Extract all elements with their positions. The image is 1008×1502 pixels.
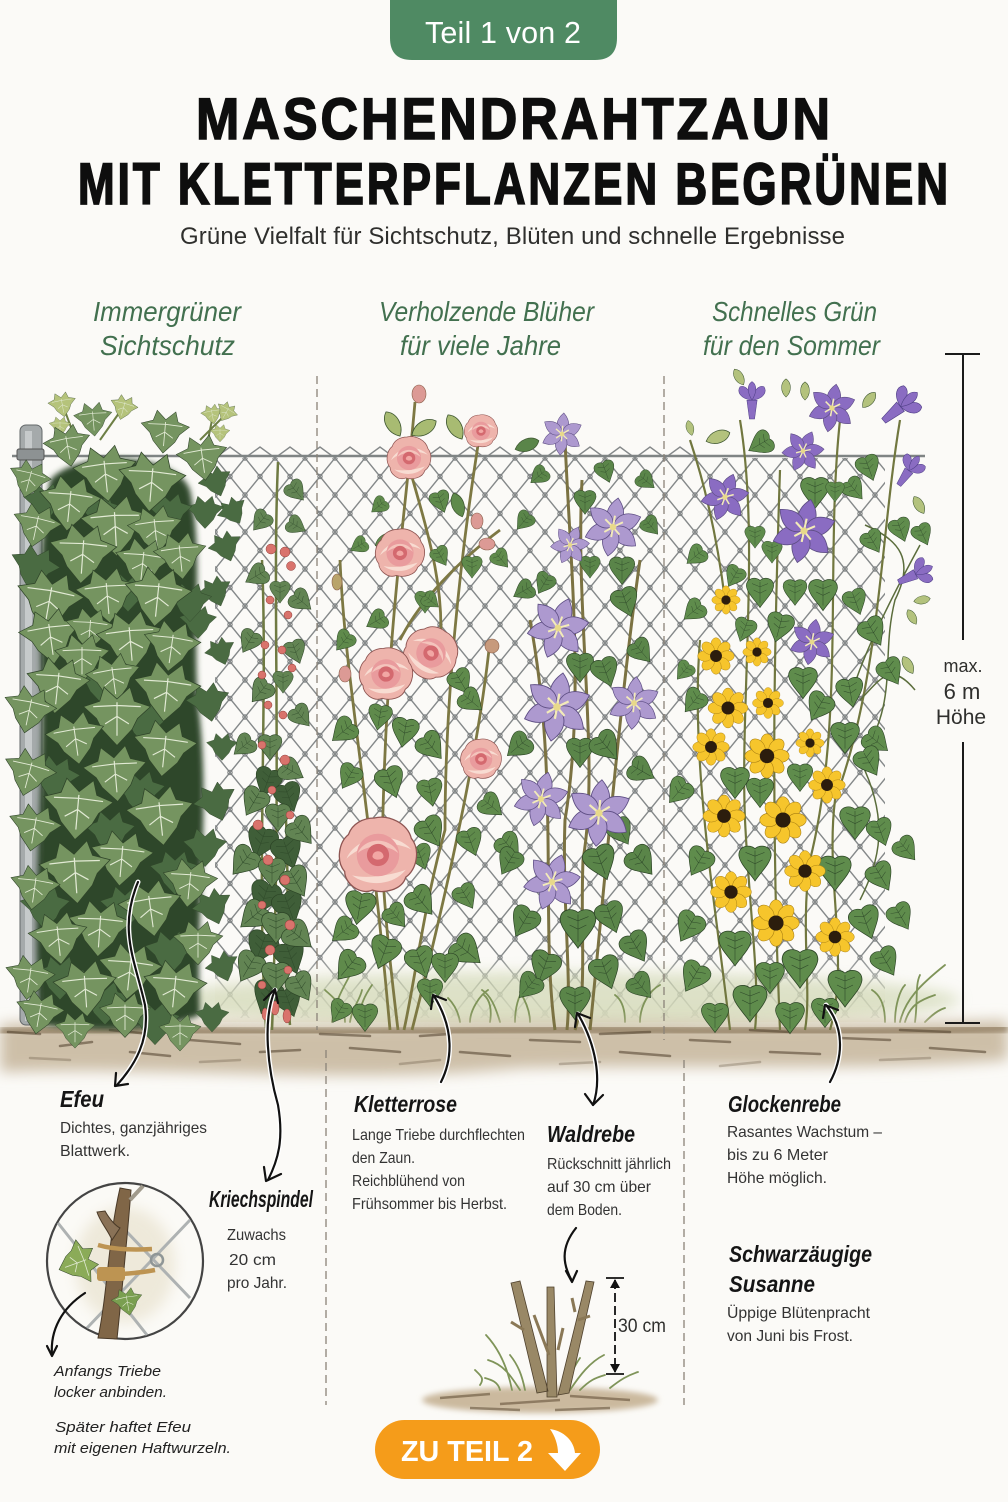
- label: Waldrebe: auf 30 cm über: [547, 1179, 652, 1196]
- label: Schwarzäugige Susanne: von Juni bis Frost.: [727, 1328, 853, 1345]
- category heading: Verholzende Blüher: Verholzende Blüher: [379, 296, 595, 327]
- label: Schwarzäugige Susanne: Üppige Blütenpracht: [727, 1304, 871, 1322]
- label: Kriechspindel: [209, 1186, 313, 1292]
- max height marker: [936, 354, 986, 1023]
- category heading: Schnelles Grün: für den Sommer: [703, 330, 881, 361]
- handwritten note: Später haftet Efeu: [54, 1419, 231, 1457]
- category heading: Schnelles Grün: [703, 296, 881, 361]
- top badge: Teil 1 von 2: [390, 0, 617, 60]
- category heading: Immergrüner Sichtschutz: Sichtschutz: [100, 330, 235, 361]
- label: Kriechspindel: Zuwachs: [227, 1227, 286, 1244]
- plant: Kriechspindel: [222, 462, 322, 1030]
- ground haze and grass: [160, 965, 960, 1028]
- handwritten note: Anfangs Triebe: locker anbinden.: [54, 1384, 167, 1401]
- handwritten note: Anfangs Triebe: [53, 1363, 167, 1401]
- arrow: Waldrebe: [575, 1013, 603, 1105]
- label: Schwarzäugige Susanne: Schwarzäugige: [729, 1241, 872, 1267]
- handwritten note: Später haftet Efeu: Später haftet Efeu: [55, 1419, 192, 1436]
- arrow: Detailkreis: [47, 1293, 85, 1356]
- label: Kletterrose: den Zaun.: [352, 1150, 415, 1167]
- subtitle: Grüne Vielfalt für Sichtschutz, Blüten und schnelle Ergebnisse: [180, 223, 845, 250]
- label: Glockenrebe: [727, 1091, 882, 1187]
- dashed dividers: [317, 376, 684, 1405]
- arrow: Rückschnitt: [565, 1228, 577, 1282]
- top badge: Teil 1 von 2: Teil 1 von 2: [425, 16, 581, 50]
- title: [78, 86, 948, 216]
- title: MASCHENDRAHTZAUN: [196, 86, 830, 152]
- label: Kriechspindel: 20 cm: [229, 1252, 276, 1269]
- label: Waldrebe: [547, 1121, 671, 1219]
- button: Zu Teil 2: [375, 1420, 600, 1479]
- button: Zu Teil 2: ZU TEIL 2: [401, 1436, 533, 1468]
- category heading: Immergrüner Sichtschutz: [93, 296, 243, 361]
- label: Efeu: Efeu: [60, 1086, 104, 1112]
- plant: Efeu: [0, 390, 253, 1051]
- handwritten note: Später haftet Efeu: mit eigenen Haftwurzeln.: [54, 1440, 231, 1457]
- pruned plant illustration: [422, 1281, 658, 1413]
- label: Kletterrose: Kletterrose: [354, 1091, 457, 1117]
- dimension: 30 cm: [606, 1278, 666, 1374]
- handwritten note: Anfangs Triebe: Anfangs Triebe: [53, 1363, 161, 1380]
- dimension: 30 cm: 30 cm: [618, 1316, 666, 1337]
- max height marker: 6 m: [944, 679, 980, 704]
- fence post: [17, 425, 44, 1025]
- label: Schwarzäugige Susanne: Susanne: [729, 1271, 815, 1297]
- arrow: Kriechspindel: [264, 989, 281, 1181]
- label: Glockenrebe: Rasantes Wachstum –: [727, 1124, 882, 1141]
- label: Kletterrose: Lange Triebe durchflechten: [352, 1127, 525, 1144]
- detail circle: Triebe anbinden: [47, 1183, 203, 1339]
- label: Kletterrose: Reichblühend von: [352, 1173, 465, 1190]
- label: Glockenrebe: Glockenrebe: [728, 1091, 841, 1117]
- title: MIT KLETTERPFLANZEN BEGRÜNEN: [78, 151, 948, 216]
- label: Kriechspindel: pro Jahr.: [227, 1275, 287, 1292]
- label: Glockenrebe: Höhe möglich.: [727, 1170, 827, 1187]
- category heading: Verholzende Blüher: für viele Jahre: [400, 330, 561, 361]
- category heading: Verholzende Blüher: [379, 296, 595, 361]
- label: Waldrebe: dem Boden.: [547, 1202, 622, 1219]
- plant: Waldrebe: [491, 411, 665, 1030]
- label: Efeu: Blattwerk.: [60, 1143, 130, 1160]
- label: Kletterrose: [352, 1091, 525, 1213]
- arrow: Glockenrebe: [823, 1005, 840, 1082]
- label: Glockenrebe: bis zu 6 Meter: [727, 1147, 829, 1164]
- chain-link fence: [12, 447, 925, 1022]
- label: Kletterrose: Frühsommer bis Herbst.: [352, 1196, 507, 1213]
- label: Efeu: [60, 1086, 207, 1160]
- plant: Glockenrebe und Schwarzäugige Susanne: [660, 367, 938, 1034]
- soil strip: [0, 1020, 1008, 1075]
- label: Waldrebe: Waldrebe: [547, 1121, 635, 1147]
- category heading: Immergrüner Sichtschutz: Immergrüner: [93, 296, 243, 327]
- arrow: Kletterrose: [431, 995, 450, 1082]
- max height marker: max.: [943, 656, 983, 676]
- arrow: Efeu: [115, 882, 146, 1086]
- label: Efeu: Dichtes, ganzjähriges: [60, 1120, 207, 1137]
- category heading: Schnelles Grün: Schnelles Grün: [712, 296, 877, 327]
- label: Schwarzäugige Susanne: [727, 1241, 872, 1345]
- label: Kriechspindel: Kriechspindel: [209, 1186, 313, 1212]
- label: Waldrebe: Rückschnitt jährlich: [547, 1156, 671, 1173]
- plant: Kletterrose: [323, 385, 528, 1032]
- max height marker: Höhe: [936, 706, 986, 729]
